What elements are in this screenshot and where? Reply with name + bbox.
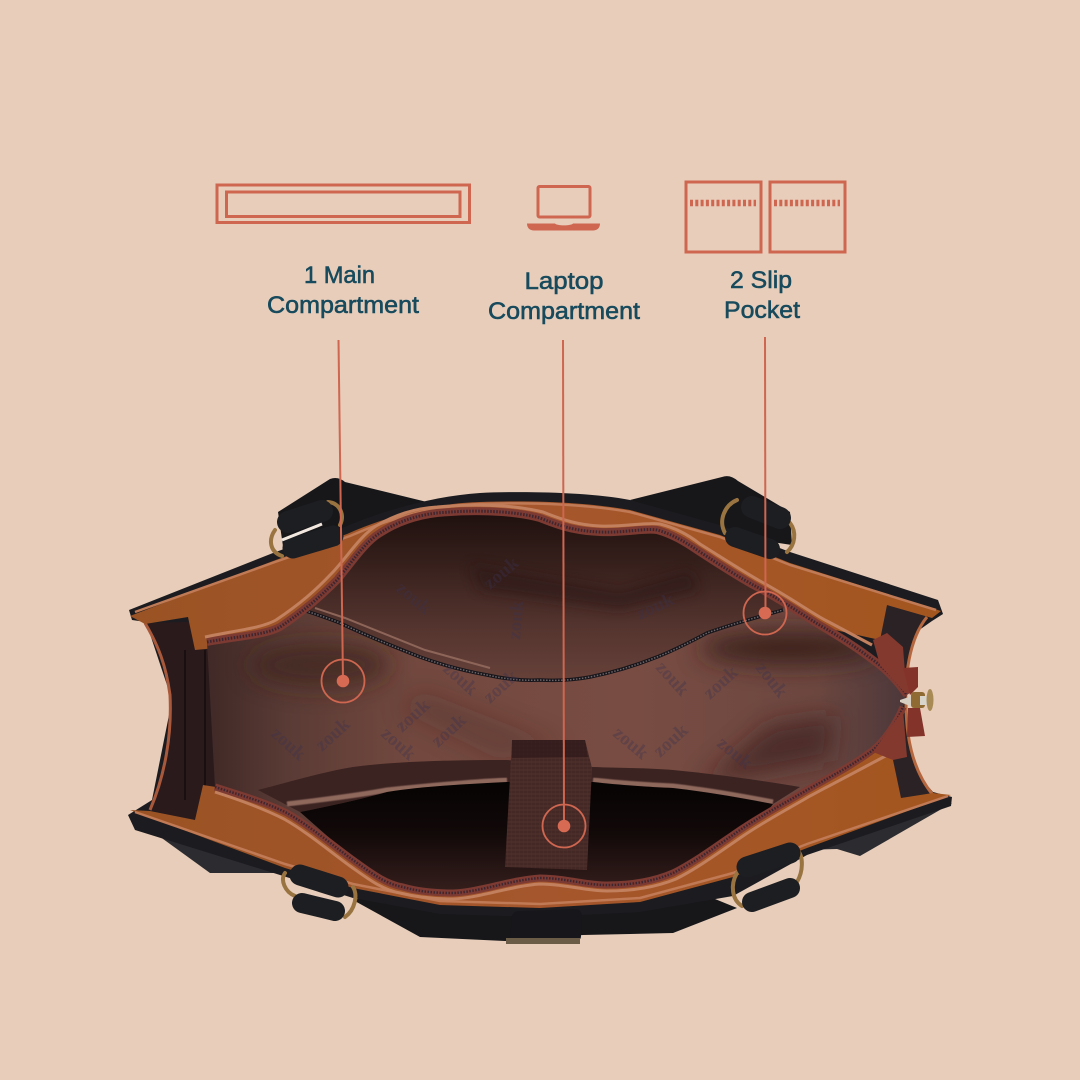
lining xyxy=(200,500,920,900)
ring top right xyxy=(722,500,794,552)
label: Laptop Compartment xyxy=(488,268,640,325)
watermark text: zouk xyxy=(439,658,482,700)
upper pocket zipper xyxy=(303,610,783,680)
label: 2 Slip Pocket: Pocket xyxy=(724,297,800,324)
lining floor xyxy=(207,607,907,838)
zipper bow right xyxy=(903,667,925,737)
left side wall xyxy=(145,620,260,822)
watermark text: zouk xyxy=(504,599,528,640)
left wall creases xyxy=(185,640,228,800)
label: Laptop Compartment: Compartment xyxy=(488,298,640,325)
roller top left back xyxy=(288,511,322,522)
back handle bottom xyxy=(353,890,737,941)
upper tan panel xyxy=(130,501,941,650)
label: 1 Main Compartment xyxy=(267,262,419,319)
watermark text: zouk xyxy=(649,720,693,762)
zipper pull button xyxy=(900,689,934,711)
upper zipper light trim xyxy=(205,505,872,645)
watermark text: zouk xyxy=(713,733,757,774)
laptop pocket interior xyxy=(300,782,773,890)
upper pocket zipper teeth xyxy=(303,610,783,680)
label: Laptop Compartment: Laptop xyxy=(524,268,604,295)
left wall edge xyxy=(145,623,170,810)
watermark text: zouk xyxy=(427,710,471,752)
roller bottom right front xyxy=(752,888,790,902)
roller top right back xyxy=(752,507,780,518)
upper pocket piping xyxy=(315,608,490,668)
back handle top xyxy=(278,476,792,560)
watermark text: zouk xyxy=(377,723,420,765)
label: 2 Slip Pocket xyxy=(724,267,800,324)
centre bottom tab xyxy=(506,909,582,944)
roller bottom left front xyxy=(302,903,335,911)
icon: two slip pockets xyxy=(686,182,845,252)
watermark text: zouk xyxy=(751,658,792,702)
watermark text: zouk xyxy=(267,723,310,765)
upper main zipper teeth xyxy=(207,511,907,695)
leader and hotspot: laptop compartment xyxy=(542,340,586,848)
watermark text: zouk xyxy=(480,552,523,594)
highlight top left xyxy=(282,524,322,540)
watermark text: zouk xyxy=(311,714,355,756)
lower tan panel xyxy=(130,745,951,908)
watermark text: zouk xyxy=(479,666,523,708)
watermark text xyxy=(267,552,792,774)
label: 1 Main Compartment: Compartment xyxy=(267,292,419,319)
watermark text: zouk xyxy=(633,589,678,625)
bag body silhouette xyxy=(128,492,952,917)
lower pocket lip xyxy=(258,760,800,812)
ring top left xyxy=(271,502,342,556)
lower zipper light trim xyxy=(215,752,893,899)
watermark text: zouk xyxy=(651,657,693,701)
label: 2 Slip Pocket: 2 Slip xyxy=(730,267,792,294)
roller bottom left back xyxy=(300,875,338,887)
roller bottom right back xyxy=(747,853,790,867)
elastic laptop strap xyxy=(505,740,592,870)
icon: laptop xyxy=(527,186,600,230)
upper pocket xyxy=(310,515,784,678)
outer pocket right xyxy=(800,800,952,856)
lining shadows xyxy=(250,632,880,785)
stitching on rims xyxy=(135,503,948,904)
watermark text: zouk xyxy=(609,723,653,764)
ring bottom left xyxy=(283,873,355,917)
roller top left front xyxy=(293,536,333,548)
watermark text: zouk xyxy=(391,695,435,737)
icon: main compartment xyxy=(217,185,470,222)
upper pocket fold xyxy=(478,572,694,611)
strap fold xyxy=(512,740,588,758)
ring bottom right xyxy=(733,850,802,906)
right side wall xyxy=(880,600,933,800)
lower main zipper teeth xyxy=(215,707,903,893)
lower main zipper xyxy=(215,707,903,893)
watermark text: zouk xyxy=(392,578,436,619)
zipper tape right xyxy=(873,633,910,760)
roller top right front xyxy=(735,537,770,549)
right wall edge xyxy=(906,617,933,795)
leader and hotspot: main compartment xyxy=(322,340,364,702)
outer pocket left xyxy=(130,815,300,873)
upper main zipper xyxy=(207,511,907,695)
leader and hotspot: slip pocket xyxy=(744,337,786,634)
bag photo illustration xyxy=(128,337,952,944)
lower pocket light edge xyxy=(287,780,773,804)
watermark text: zouk xyxy=(699,662,743,704)
label: 1 Main Compartment: 1 Main xyxy=(304,262,375,289)
